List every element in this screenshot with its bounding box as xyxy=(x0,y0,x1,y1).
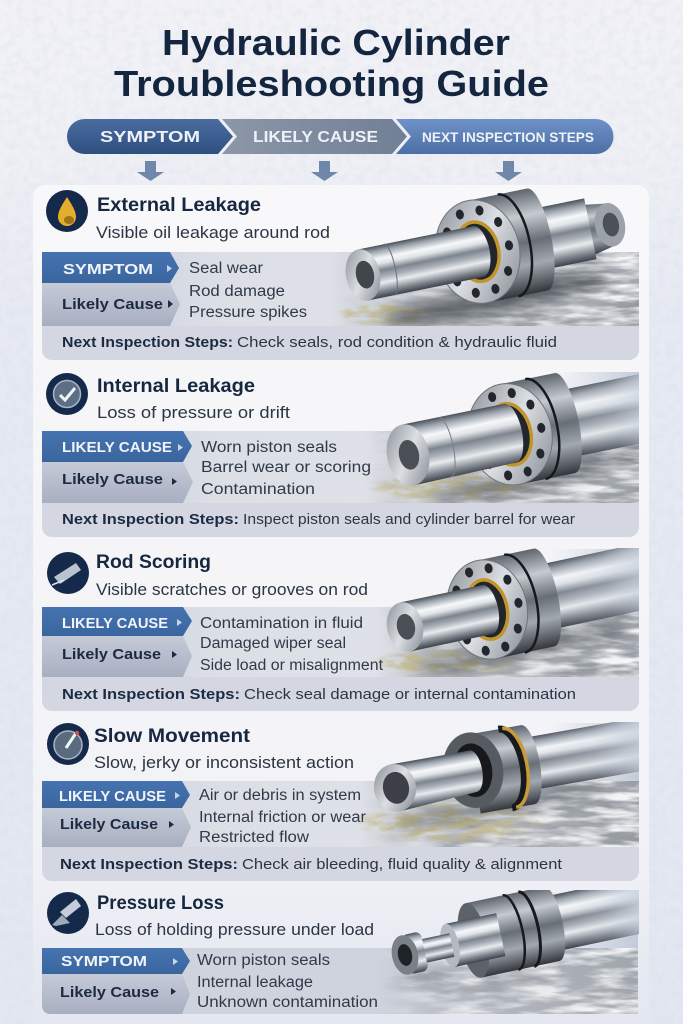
next inspection row: Inspect piston seals and cylinder barrel for wear xyxy=(243,512,575,528)
cause list: Damaged wiper seal xyxy=(200,635,346,652)
heading: External Leakage xyxy=(97,195,261,216)
symptom description: Loss of holding pressure under load xyxy=(95,921,374,939)
cause list: Air or debris in system xyxy=(199,787,361,804)
label: likely cause: Likely Cause xyxy=(60,816,158,833)
step: likely cause: LIKELY CAUSE xyxy=(253,129,378,146)
cause list: Pressure spikes xyxy=(189,304,307,321)
icon: clock gauge xyxy=(46,373,88,415)
step: symptom: SYMPTOM xyxy=(100,129,200,146)
heading: Internal Leakage xyxy=(97,376,255,397)
cause list: Seal wear xyxy=(189,260,263,277)
cause list xyxy=(201,439,371,498)
label: likely cause: Likely Cause xyxy=(62,646,161,663)
ground image xyxy=(330,252,639,326)
heading: Pressure Loss xyxy=(97,893,224,914)
cause list: Contamination in fluid xyxy=(200,615,363,632)
label: likely cause: LIKELY CAUSE xyxy=(62,616,168,632)
label: likely cause xyxy=(42,283,180,326)
next inspection row: Check air bleeding, fluid quality & alignment xyxy=(242,857,562,873)
next inspection row xyxy=(42,677,639,711)
cause list xyxy=(200,615,384,674)
next inspection row xyxy=(42,847,639,881)
label: symptom xyxy=(42,948,190,974)
cause list: Internal friction or wear xyxy=(199,809,366,826)
ground image xyxy=(370,549,639,677)
label: likely cause xyxy=(42,462,193,503)
cause list xyxy=(197,952,378,1011)
main card xyxy=(33,185,649,1024)
next inspection row xyxy=(42,503,639,537)
panel: Rod Scoring xyxy=(42,548,639,711)
illustration: stepped piston cylinder xyxy=(392,890,639,978)
label: likely cause xyxy=(42,781,190,808)
label: likely cause: LIKELY CAUSE xyxy=(62,440,172,456)
illustration: hydraulic cylinder xyxy=(386,373,639,503)
next inspection row: Next Inspection Steps: xyxy=(62,512,239,528)
process header bar xyxy=(67,119,614,154)
icon: speed gauge xyxy=(47,723,89,765)
ground image xyxy=(365,372,639,503)
icon: trowel rod xyxy=(47,892,89,934)
panel: Pressure Loss xyxy=(42,890,639,1014)
step: likely cause xyxy=(222,119,407,154)
icon: oil drop xyxy=(46,190,88,232)
step: next inspection steps: NEXT INSPECTION STEPS xyxy=(422,129,594,145)
label: likely cause xyxy=(42,431,192,462)
arrow: likely cause down xyxy=(311,161,338,181)
label: likely cause xyxy=(42,974,190,1014)
cause list xyxy=(199,787,366,846)
cause list: Unknown contamination xyxy=(197,994,378,1011)
label: likely cause: Likely Cause xyxy=(60,984,159,1001)
label: likely cause xyxy=(42,808,191,847)
arrow: next steps down xyxy=(495,161,522,181)
cause list: Rod damage xyxy=(189,283,285,300)
next inspection row xyxy=(42,326,639,360)
next inspection row: Check seal damage or internal contamination xyxy=(244,687,576,703)
cause list: Side load or misalignment xyxy=(200,657,384,674)
cause list: Worn piston seals xyxy=(197,952,330,969)
label: symptom: SYMPTOM xyxy=(63,262,153,278)
cause list: Worn piston seals xyxy=(201,439,337,456)
panel: External Leakage xyxy=(42,171,639,360)
step: symptom xyxy=(67,119,233,154)
title: Hydraulic Cylinder xyxy=(162,22,510,63)
next inspection row: Next Inspection Steps: xyxy=(62,687,240,703)
label: likely cause: Likely Cause xyxy=(62,471,163,488)
symptom description: Visible scratches or grooves on rod xyxy=(96,581,368,599)
panel: Internal Leakage xyxy=(42,372,639,537)
label: likely cause: LIKELY CAUSE xyxy=(59,789,166,805)
ground image xyxy=(350,723,639,847)
next inspection row: Check seals, rod condition & hydraulic fluid xyxy=(237,335,557,351)
band background xyxy=(42,781,639,847)
cause list: Internal leakage xyxy=(197,974,313,991)
band background xyxy=(42,431,639,503)
illustration: cylinder with gold seal band xyxy=(374,722,639,834)
label: likely cause: Likely Cause xyxy=(62,296,163,313)
heading: Rod Scoring xyxy=(96,552,211,573)
label: symptom: SYMPTOM xyxy=(61,954,147,970)
band background xyxy=(42,948,638,1014)
step: next inspection steps xyxy=(396,119,614,154)
label: likely cause xyxy=(42,636,192,677)
cause list xyxy=(189,260,307,321)
arrow: symptom down xyxy=(137,161,164,181)
label: symptom xyxy=(42,252,179,283)
icon: scored rod xyxy=(47,552,89,594)
symptom description: Loss of pressure or drift xyxy=(97,404,290,422)
illustration: hydraulic cylinder with lug xyxy=(346,188,626,326)
heading: Slow Movement xyxy=(94,726,251,747)
symptom description: Slow, jerky or inconsistent action xyxy=(94,754,354,772)
next inspection row: Next Inspection Steps: xyxy=(60,857,238,873)
illustration: scored cylinder xyxy=(386,548,639,677)
panel: Slow Movement xyxy=(42,722,639,881)
next inspection row: Next Inspection Steps: xyxy=(62,335,233,351)
cause list: Barrel wear or scoring xyxy=(201,459,371,476)
title: Troubleshooting Guide xyxy=(114,63,549,104)
title xyxy=(114,22,549,104)
label: likely cause xyxy=(42,607,192,636)
cause list: Restricted flow xyxy=(199,829,310,846)
band background xyxy=(42,252,639,326)
symptom description: Visible oil leakage around rod xyxy=(96,224,330,242)
cause list: Contamination xyxy=(201,481,315,498)
ground image xyxy=(375,892,638,1014)
band background xyxy=(42,607,639,677)
